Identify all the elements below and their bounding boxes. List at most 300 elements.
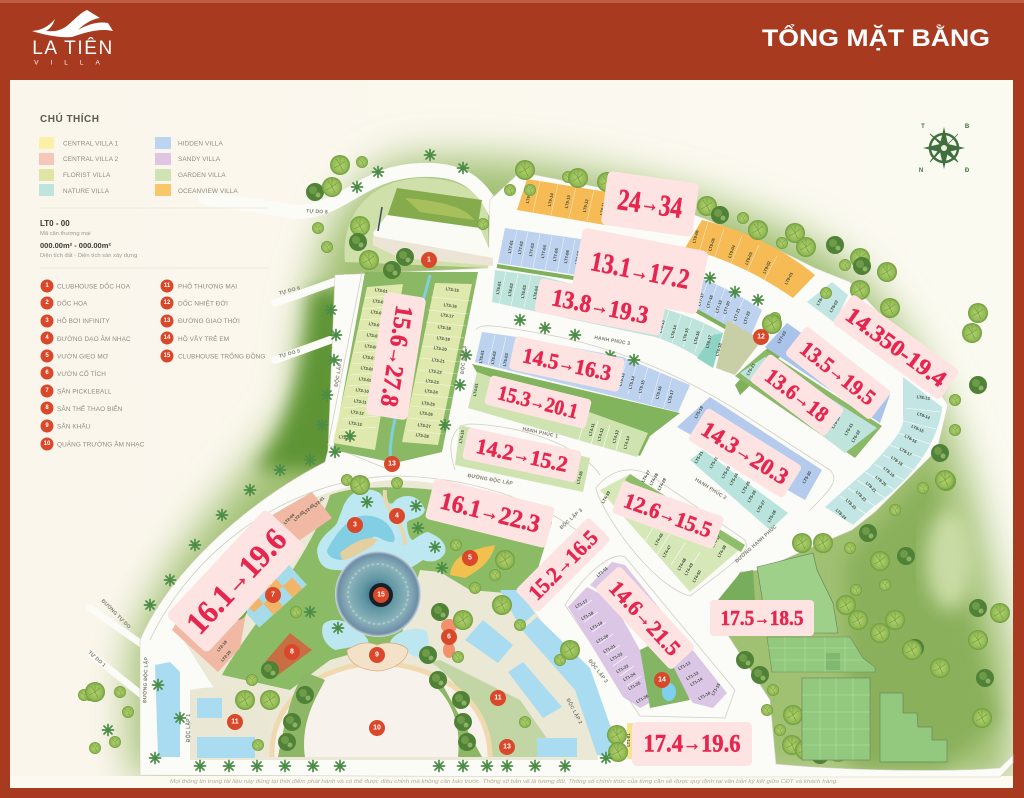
villa block: hidden LT5: LT5-03 <box>502 352 509 367</box>
badge: 14.5 to 16.3 <box>509 336 625 392</box>
badge: 15.6 to 27.8: 15.6→27.8 <box>375 304 417 408</box>
badge: 16.1 to 22.3: 16.1→22.3 <box>437 488 543 538</box>
villa block: hidden LT7: LT7-03 <box>528 242 535 257</box>
swatch list: NATURE VILLA <box>63 188 110 195</box>
villa block: nature LT6: LT6-18 <box>714 342 723 357</box>
villa block: garden LT4 south: LT4-38 <box>716 544 727 558</box>
legend: amenities list: DỐC HOA <box>57 298 88 308</box>
badge: 14.3 to 20.3: 14.3→20.3 <box>697 416 793 490</box>
green sports building B <box>767 637 875 672</box>
map number markers: 3 <box>353 522 357 528</box>
legend: amenities list: SÂN THỂ THAO BIỂN <box>57 404 123 413</box>
badge: 24 to 34: 24→34 <box>616 183 684 225</box>
villa block: garden LT4 lower row: LT4-26 <box>575 470 584 485</box>
villa block: florist LT3: LT3-27 <box>417 422 432 429</box>
villa block: oceanview LT9: LT9-15 <box>525 189 532 204</box>
villa block: florist LT3: LT3-11 <box>353 398 368 405</box>
villa block: hidden LT5: LT5-14 <box>627 375 636 390</box>
villa block: oceanview LT9: LT9-06 <box>691 229 700 244</box>
villa block: hidden LT5: LT5-02 <box>490 350 497 365</box>
badge: 14.5 to 16.3: 14.5→16.3 <box>520 342 614 386</box>
swatch list: HIDDEN VILLA <box>178 140 224 148</box>
villa block: sandy LT1: LT1-01 <box>595 565 609 578</box>
villa block: florist LT3: LT3-12 <box>350 409 365 416</box>
villa block: florist LT3: LT3-21 <box>431 357 446 364</box>
villa block: sandy LT1: LT1-22 <box>609 651 624 662</box>
compass: B <box>965 124 970 130</box>
map number markers: 1 <box>427 256 431 264</box>
legend: amenities list: 6 <box>45 370 49 376</box>
villa block: hidden LT7: LT7-17 <box>696 292 705 307</box>
map number markers: 15 <box>377 592 385 598</box>
legend: amenities list: 5 <box>45 353 49 359</box>
villa block: hidden and nature LT5 lower: LT5-21 <box>693 450 704 464</box>
badge: 14.3 to 20.3 <box>687 407 803 499</box>
legend: amenities list: 1 <box>45 283 49 289</box>
road names: ĐỘC LẬP 3 <box>557 506 584 531</box>
map number markers: 9 <box>375 652 379 658</box>
villa block: central villa 2: LT2-01 <box>313 495 326 508</box>
badge: 13.1 to 17.2 <box>571 227 709 315</box>
villa block: central villa 2: LT2-04 <box>283 512 296 525</box>
villa block: florist LT3: LT3-25 <box>421 400 436 407</box>
road names <box>87 208 779 742</box>
villa block: hidden and nature LT5 lower: LT5-25 <box>740 480 751 494</box>
legend: lot key: Diện tích đất - Diện tích sàn xây dựng <box>40 253 137 259</box>
legend: amenities list: SÂN PICKLEBALL <box>57 386 112 396</box>
villa block: sandy LT1: LT1-16 <box>697 690 712 701</box>
map number markers: 11 <box>231 718 239 726</box>
villa block: garden LT4 lower row: LT4-25 <box>564 462 573 477</box>
villa block: nature LT6: LT6-02 <box>507 282 514 297</box>
legend: amenities list: 3 <box>45 318 49 324</box>
villa block: oceanview LT9: LT9-12 <box>582 198 589 213</box>
infinity pool <box>317 489 445 575</box>
villa block: sandy LT1 <box>568 562 727 708</box>
villa block: hidden and nature LT5 lower: LT5-29 <box>791 465 802 479</box>
stage: sân khấu <box>347 643 408 671</box>
swatch list: OCEANVIEW VILLA <box>178 188 238 195</box>
map number markers: 12 <box>757 334 765 340</box>
badge: 14.2 to 15.2: 14.2→15.2 <box>474 433 570 477</box>
map number markers: 11 <box>494 694 502 702</box>
garden: vườn gieo mơ <box>450 545 495 578</box>
villa block: sandy LT1: LT1-17 <box>574 598 589 609</box>
villa block: florist LT3: LT3-28 <box>415 432 430 439</box>
villa block: hidden LT7: LT7-07 <box>574 250 581 265</box>
villa block: nature LT8: LT8-15 <box>911 424 925 434</box>
green sports building C <box>802 678 870 760</box>
legend: amenities list: 9 <box>45 423 49 429</box>
villa block: florist LT3: LT3-04 <box>368 321 383 328</box>
villa block: nature LT6: LT6-13 <box>657 319 666 334</box>
villa block: nature LT6: LT6-17 <box>704 334 713 349</box>
villa block: florist LT3: LT3-14 <box>338 434 353 441</box>
legend: amenities list: 2 <box>45 300 49 306</box>
villa block: nature LT8: LT8-01 <box>815 292 826 306</box>
villa block: sandy LT1: LT1-12 <box>677 660 692 671</box>
badge: 13.5 to 19.5 <box>784 326 892 420</box>
commercial villa blocks (blue) <box>155 590 617 758</box>
road names: HẠNH PHÚC 2 <box>694 476 728 501</box>
road names: TỰ DO 5 <box>278 348 301 360</box>
villa block: nature LT8: LT8-24 <box>835 508 848 521</box>
map number markers: 14 <box>658 676 666 684</box>
villa block: hidden LT7: LT7-18 <box>705 294 714 309</box>
legend: lot key: Mã căn thương mại <box>40 231 91 237</box>
compass <box>919 124 970 174</box>
villa block: garden LT4 upper: LT4-01 <box>472 382 479 397</box>
road names: ĐƯỜNG HẠNH PHÚC <box>733 522 779 565</box>
villa block: nature LT6: LT6-01 <box>495 280 502 295</box>
villa block: oceanview LT9: LT9-11 <box>599 201 606 216</box>
villa block: florist LT3: LT3-18 <box>437 324 452 331</box>
villa block: florist LT3: LT3-10 <box>355 387 370 394</box>
swatch list: CENTRAL VILLA 2 <box>63 156 119 163</box>
villa block: hidden LT6 by 13.5 badge <box>765 323 890 423</box>
badge: 17.5 to 18.5 <box>710 600 814 636</box>
villa block: florist LT3: LT3-05 <box>366 332 381 339</box>
villa block: florist LT3: LT3-17 <box>440 312 455 319</box>
legend: amenities list: 8 <box>45 405 49 411</box>
road names: ĐỘC LẬP 3 <box>458 345 468 374</box>
swatch list: CENTRAL VILLA 1 <box>63 140 119 148</box>
villa block: oceanview LT9: LT9-03 <box>744 251 754 265</box>
legend: amenities list: VƯỜN GIEO MƠ <box>57 352 109 360</box>
clubhouse trống đồng dome <box>335 551 421 637</box>
title: TỔNG MẶT BẰNG <box>762 24 990 52</box>
badge: 17.4 to 19.6: 17.4→19.6 <box>644 730 740 758</box>
villa block: garden LT4 south: LT4-39 <box>600 490 611 504</box>
villa block: sandy LT1: LT1-20 <box>595 633 610 644</box>
villa block: central villa 2 <box>172 492 332 672</box>
map number markers: 7 <box>271 592 275 598</box>
villa block: garden LT4 south: LT4-29 <box>656 477 667 491</box>
legend: amenities list: VƯỜN CỔ TÍCH <box>57 369 106 378</box>
villa block: sandy LT1: LT1-21 <box>602 643 617 654</box>
villa block: hidden LT7: LT7-21 <box>732 307 741 322</box>
road names: TỰ DO 1 <box>87 650 107 669</box>
villa block: nature LT6-21 row: LT6-30 <box>830 415 841 429</box>
villa block: florist LT3: LT3-06 <box>364 343 379 350</box>
villa block: nature LT8: LT8-13 <box>916 394 931 401</box>
badge: 12.6 to 15.5 <box>611 481 725 549</box>
map number markers: 4 <box>395 512 399 520</box>
villa block: nature LT6 <box>492 270 723 368</box>
villa block: nature LT6: LT6-04 <box>532 285 539 300</box>
badge: 13.6 to 18: 13.6→18 <box>760 363 834 427</box>
villa block: central villa 2: LT2-02 <box>303 502 316 515</box>
villa block: hidden LT7: LT7-22 <box>742 310 751 325</box>
villa block: nature LT8: LT8-23 <box>845 498 858 511</box>
villa block: hidden LT7: LT7-02 <box>517 240 524 255</box>
villa block: sandy LT1: LT1-25 <box>627 680 642 691</box>
villa block: hidden and nature LT5 lower: LT5-30 <box>801 470 812 484</box>
map number markers: 5 <box>468 554 472 562</box>
legend: amenities list: CLUBHOUSE TRỐNG ĐỒNG <box>178 350 265 360</box>
legend: amenities list: 11 <box>164 283 171 289</box>
panel: site base with internal roads <box>140 172 1013 777</box>
villa block: nature LT6-21 row <box>735 350 882 458</box>
villa block: central villa 2: LT2-20 <box>220 649 232 663</box>
badge: 14.6 to 21.5: 14.6→21.5 <box>604 575 686 661</box>
villa block: sandy LT1: LT1-23 <box>615 663 630 674</box>
trees and palms <box>78 150 1010 772</box>
badge: 13.8 to 19.3: 13.8→19.3 <box>549 284 651 330</box>
villa block: nature LT8: LT8-22 <box>855 490 868 503</box>
villa block: hidden and nature LT5 lower: LT5-24 <box>728 472 739 486</box>
villa block: sandy LT1: LT1-26 <box>635 693 650 704</box>
villa block: hidden and nature LT5 lower: LT5-27 <box>755 499 766 513</box>
road names: HẠNH PHÚC 3 <box>594 334 631 347</box>
badge: 24 to 34 <box>601 171 699 237</box>
logo: La Tiên Villa: LA TIÊN <box>32 37 114 59</box>
badge: 13.5 to 19.5: 13.5→19.5 <box>795 336 881 410</box>
villa block: nature LT6-21 row: LT6-32 <box>850 429 861 443</box>
footnote: Mọi thông tin trong tài liệu này đúng tại thời điểm phát hành và có thể được điều chỉnh mà không cần báo trước. Thông số bản vẽ là tương đối. Thông số chính thức của từng căn sẽ được quy định tại văn bản ký kết giữa CĐT và khách hàng. <box>170 778 838 785</box>
badge: 12.6 to 15.5: 12.6→15.5 <box>620 488 716 542</box>
villa block: oceanview LT9: LT9-04 <box>727 244 736 259</box>
map number markers <box>227 252 769 755</box>
villa block: garden LT4 south <box>600 469 745 592</box>
villa block: hidden LT7: LT7-01 <box>507 239 514 254</box>
villa block: florist LT3: LT3-19 <box>436 335 451 342</box>
road names: TỰ DO 6 <box>278 285 301 297</box>
legend: amenities list: ĐƯỜNG DẠO ÂM NHẠC <box>57 334 131 343</box>
legend: amenities list <box>40 280 265 450</box>
legend: amenities list: 14 <box>164 335 171 341</box>
villa block: hidden LT7: LT7-19 <box>714 299 723 314</box>
villa block: nature LT8: LT8-02 <box>828 299 839 313</box>
legend: amenities list: 4 <box>45 335 49 341</box>
legend: amenities list: SÂN KHẤU <box>57 420 91 430</box>
villa block: hidden LT5: LT5-13 <box>617 372 626 387</box>
legend: amenities list: CLUBHOUSE DỐC HOA <box>57 280 131 290</box>
legend: amenities list: PHỐ THƯƠNG MẠI <box>178 280 237 290</box>
villa block: hidden and nature LT5 lower <box>677 397 822 530</box>
legend: amenities list: HỒ VẪY TRẺ EM <box>178 333 229 343</box>
map number markers: 8 <box>290 648 294 656</box>
badge: 14.2 to 15.2 <box>462 427 582 483</box>
villa block: nature LT8: LT8-16 <box>904 433 918 444</box>
villa block: central villa 2: LT2-03 <box>293 509 306 522</box>
villa block: garden LT4 upper: LT4-14 <box>622 435 631 450</box>
pickleball court <box>239 562 307 628</box>
road names: ĐỘC LẬP 1 <box>184 714 192 742</box>
green sports building A <box>718 553 838 633</box>
villa block: florist LT3: LT3-03 <box>370 309 385 316</box>
price badges <box>166 171 960 766</box>
legend: amenities list: 15 <box>164 353 171 359</box>
compass: Đ <box>965 168 970 174</box>
swatch list: GARDEN VILLA <box>178 172 226 179</box>
road names: ĐƯỜNG ĐỘC LẬP <box>467 471 514 487</box>
villa block: hidden LT5: LT5-15 <box>637 379 646 394</box>
villa block: florist LT3: LT3-08 <box>360 365 375 372</box>
legend: lot key: LT0 - 00 <box>40 219 70 228</box>
villa block: florist LT3: LT3-22 <box>428 368 443 375</box>
villa block: nature LT6-21 row: LT6-31 <box>843 422 854 436</box>
road names: ĐƯỜNG ĐỘC LẬP <box>140 656 150 703</box>
legend: amenities list: HỒ BƠI INFINITY <box>57 315 110 325</box>
logo: La Tiên Villa <box>32 10 114 66</box>
central park base <box>176 480 598 760</box>
villa block: garden LT4 south: LT4-48 <box>676 557 687 571</box>
villa block: garden LT4 lower row <box>455 425 590 492</box>
villa block: nature LT8: LT8-17 <box>899 446 913 457</box>
villa block: hidden and nature LT5 lower: LT5-22 <box>708 455 719 469</box>
compass: N <box>919 168 923 174</box>
badge: 15.6 to 27.8 <box>366 291 426 421</box>
villa block: nature LT6: LT6-15 <box>681 327 690 342</box>
legend: amenities list: 10 <box>44 441 51 447</box>
legend: amenities list: QUẢNG TRƯỜNG ÂM NHẠC <box>57 440 145 448</box>
road names: HẠNH PHÚC 1 <box>522 425 559 440</box>
panel: green landscape ground <box>10 158 1013 788</box>
lower pools <box>322 620 429 658</box>
villa block: hidden LT7: LT7-04 <box>540 244 547 259</box>
villa block: oceanview LT9: LT9-13 <box>564 194 571 209</box>
villa block: hidden and nature LT5 lower: LT5-23 <box>720 465 731 479</box>
villa block: hidden LT5 <box>475 332 690 412</box>
villa block: florist LT3 <box>333 272 478 463</box>
hedges between rows <box>497 266 752 342</box>
villa block: oceanview LT9: LT9-01 <box>783 271 794 285</box>
swatch list: FLORIST VILLA <box>63 172 111 179</box>
garden: vườn cổ tích <box>441 619 457 658</box>
villa block: garden LT4 upper: LT4-11 <box>587 422 596 437</box>
villa block: central villa 2: LT2-19 <box>216 639 228 653</box>
legend: lot key <box>40 208 268 268</box>
road names: TỰ DO 8 <box>306 208 328 216</box>
villa block: florist LT3: LT3-07 <box>362 354 377 361</box>
villa block: sandy LT1: LT1-14 <box>689 676 704 687</box>
badge: 13.6 to 18 <box>749 353 845 437</box>
legend: villa types <box>39 112 238 196</box>
legend: amenities list: DỐC NHIỆT ĐỚI <box>178 298 228 308</box>
villa block: sandy LT1: LT1-15 <box>710 682 721 696</box>
villa block: garden LT4 south: LT4-50 <box>691 569 702 583</box>
villa block: nature LT8: LT8-18 <box>890 455 904 467</box>
villa block: garden LT4 south: LT4-47 <box>661 544 672 558</box>
badge: 15.3 to 20.1: 15.3→20.1 <box>495 380 581 424</box>
villa block: nature LT6-21 row: LT6-21 <box>745 362 756 376</box>
road names: ĐƯỜNG TỰ DO <box>100 597 133 630</box>
villa block: hidden LT7 <box>498 228 762 338</box>
villa block: florist LT3: LT3-15 <box>445 286 460 293</box>
villa block: garden LT4 upper: LT4-13 <box>611 429 620 444</box>
badge: 16.1 to 22.3 <box>425 478 555 548</box>
badge: 13.1 to 17.2: 13.1→17.2 <box>588 246 692 296</box>
villa block: nature LT8 <box>807 282 942 525</box>
villa block: hidden LT6 by 13.5 badge: LT7-23 <box>776 330 787 344</box>
villa block: nature LT8: LT8-14 <box>916 411 931 420</box>
villa block: hidden and nature LT5 lower: LT5-26 <box>746 489 757 503</box>
villa block: garden LT4 upper <box>468 364 680 460</box>
villa block: hidden LT5: LT5-01 <box>478 349 485 364</box>
villa block: oceanview LT9 <box>517 179 815 298</box>
villa block: nature LT6: LT6-16 <box>692 330 701 345</box>
central villa 1 lot <box>626 723 633 759</box>
badge: 13.8 to 19.3 <box>534 278 666 336</box>
villa block: oceanview LT9: LT9-05 <box>707 237 716 252</box>
villa block: sandy LT1: LT1-13 <box>685 670 700 681</box>
villa block: oceanview LT9: LT9-14 <box>547 192 554 207</box>
map number markers: 13 <box>388 460 396 468</box>
legend heading: CHÚ THÍCH <box>40 112 100 125</box>
villa block: florist LT3: LT3-02 <box>372 298 387 305</box>
villa block: garden LT4 lower row: LT4-15 <box>458 429 465 444</box>
badge: 15.2 to 16.5: 15.2→16.5 <box>523 525 603 605</box>
map number markers: 6 <box>447 634 451 640</box>
clubhouse dốc hoa building <box>344 178 493 268</box>
plaza dốc nhiệt đới <box>716 320 782 395</box>
villa block: hidden and nature LT5 lower: LT5-19 <box>693 405 704 419</box>
plaza: quảng trường âm nhạc <box>272 663 490 757</box>
villa block: hidden LT7: LT7-05 <box>552 247 559 262</box>
badge: 17.4 to 19.6 <box>632 722 752 766</box>
green sports building D <box>880 693 947 762</box>
road names: ĐỘC LẬP 2 <box>565 697 585 725</box>
badge: 15.3 to 20.1 <box>484 375 592 429</box>
villa block: oceanview LT9: LT9-02 <box>762 260 772 274</box>
swatch list: SANDY VILLA <box>178 156 221 163</box>
central villa 1 lot: LT1-01 <box>626 733 631 747</box>
villa block: garden LT4 upper: LT4-12 <box>596 427 605 442</box>
villa block: florist LT3: LT3-16 <box>443 302 458 309</box>
legend: lot key: 000.00m² - 000.00m² <box>40 241 111 250</box>
villa block: garden LT4 south: LT4-49 <box>683 562 694 576</box>
villa block: nature LT8: LT8-21 <box>865 481 878 494</box>
villa block: florist LT3: LT3-26 <box>419 410 434 417</box>
villa block: garden LT4 south: LT4-28 <box>648 472 659 486</box>
beach sports court <box>265 633 312 675</box>
villa block: hidden LT7: LT7-20 <box>722 300 731 315</box>
villa block: sandy LT1: LT1-18 <box>580 610 595 621</box>
road names: HẠNH PHÚC 4 <box>629 239 666 252</box>
villa block: hidden LT7: LT7-06 <box>563 249 570 264</box>
villa block: nature LT8: LT8-20 <box>874 475 888 487</box>
legend: amenities list: 13 <box>164 318 171 324</box>
villa block: hidden and nature LT5 lower: LT5-28 <box>766 509 777 523</box>
villa block: florist LT3: LT3-13 <box>348 420 363 427</box>
road names: ĐỘC LẬP 4 <box>332 358 344 387</box>
badge: 16.1 to 19.6: 16.1→19.6 <box>179 521 293 641</box>
legend: amenities list: 12 <box>164 300 171 306</box>
badge: 14,350 to 19.4 <box>832 294 960 400</box>
villa block: florist LT3: LT3-09 <box>358 376 373 383</box>
villa block: garden LT4 south: LT4-27 <box>640 469 651 483</box>
villa block: garden LT4 south: LT4-37 <box>710 534 721 548</box>
villa block: florist LT3: LT3-01 <box>374 287 389 294</box>
road names: ĐỘC LẬP 3 <box>587 657 610 684</box>
legend: amenities list: ĐƯỜNG GIAO THỜI <box>178 316 240 325</box>
villa block: florist LT3: LT3-24 <box>424 388 439 395</box>
block outlines <box>150 272 834 718</box>
badge: 17.5 to 18.5: 17.5→18.5 <box>720 606 804 630</box>
villa block: nature LT6: LT6-03 <box>520 284 527 299</box>
badge: 14.6 to 21.5 <box>594 565 696 671</box>
villa block: nature LT8: LT8-19 <box>882 466 896 478</box>
map number markers: 10 <box>373 724 381 732</box>
villa block: florist LT3: LT3-20 <box>433 345 448 352</box>
swatch list <box>39 137 238 196</box>
logo: La Tiên Villa: VILLA <box>34 60 112 66</box>
villa block: florist LT3: LT3-23 <box>425 378 440 385</box>
map number markers: 13 <box>503 744 511 750</box>
villa block: nature LT6: LT6-14 <box>669 324 678 339</box>
villa block: garden LT4 south: LT4-46 <box>653 532 664 546</box>
